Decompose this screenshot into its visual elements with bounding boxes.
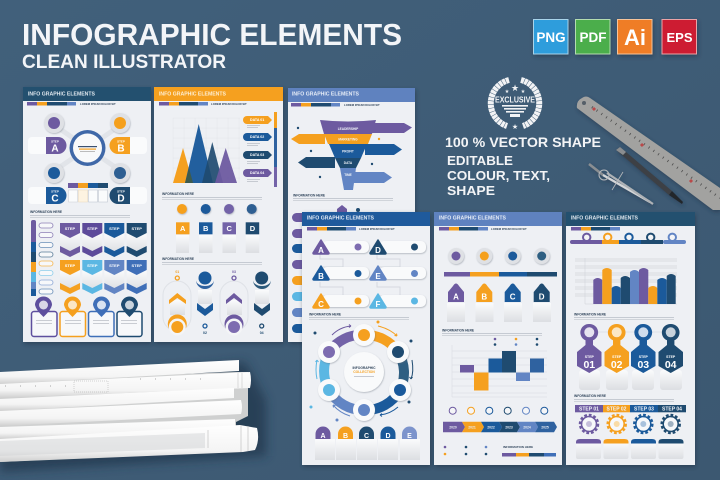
stars: ★ — [511, 83, 519, 93]
data tags — [243, 116, 272, 177]
cycle ring — [310, 320, 413, 422]
data tags: DATA 04 — [250, 171, 264, 175]
title: CLEAN ILLUSTRATOR — [22, 51, 226, 73]
cycle bullets — [310, 320, 412, 422]
colour strip: LOREM IPSUM DOLOR SIT — [80, 102, 116, 106]
panel 5: tags and bar chart — [434, 212, 562, 465]
info heading: INFORMATION HERE — [30, 210, 62, 214]
bell tags: C — [510, 292, 516, 302]
roll 3 — [0, 388, 234, 411]
bottom tabs: C — [364, 433, 369, 440]
teal triangle — [202, 142, 223, 183]
data tags: DATA 02 — [250, 135, 264, 139]
step C: STEP — [51, 190, 59, 194]
step A: STEP — [51, 140, 59, 144]
title — [22, 17, 402, 73]
step pills — [39, 223, 53, 294]
data tags: DATA 03 — [250, 153, 264, 157]
header — [154, 87, 283, 101]
roll 6 — [0, 425, 258, 462]
letter triangles: A — [318, 246, 324, 255]
bottom tabs: B — [343, 433, 348, 440]
badge: EPS — [662, 20, 696, 54]
step pin 01 — [577, 324, 602, 373]
colour strip — [291, 103, 380, 107]
node icons — [323, 329, 406, 416]
funnel labels — [338, 127, 359, 177]
step bar — [444, 272, 557, 276]
process column 03: 03 — [232, 270, 236, 274]
step pin 03 — [631, 324, 656, 373]
letter triangles: B — [318, 272, 324, 281]
timeline bar — [570, 240, 686, 244]
info heading — [162, 257, 262, 265]
header: INFO GRAPHIC ELEMENTS — [159, 92, 226, 98]
header: INFO GRAPHIC ELEMENTS — [439, 216, 506, 222]
side pills — [292, 213, 312, 333]
chart bands — [575, 258, 677, 304]
colour strip — [27, 102, 116, 106]
panel sheet — [288, 88, 415, 342]
overlap — [185, 168, 193, 183]
step pin 02: STEP — [612, 355, 622, 359]
arrow purple — [372, 123, 412, 133]
step pin 04: STEP — [666, 355, 676, 359]
format badges — [534, 20, 696, 54]
panel 1: hub and steps — [23, 87, 151, 342]
colour strip — [571, 227, 620, 230]
year arrows: 2021 — [468, 425, 476, 429]
badge: EPS: EPS — [666, 30, 693, 45]
funnel blue — [329, 144, 367, 158]
stars: ★ — [512, 123, 518, 131]
ring nodes — [318, 324, 411, 421]
step bar: STEP 02 — [607, 407, 627, 413]
year arrows: 2022 — [487, 425, 495, 429]
bottom tabs — [316, 426, 417, 440]
arrow light blue — [353, 172, 392, 183]
letter blocks: B — [203, 224, 209, 233]
centre hub: COLLECTION — [353, 370, 375, 374]
step banners row 2 — [60, 260, 147, 294]
bell tags: D — [539, 292, 545, 302]
step bar: STEP 01 — [579, 407, 599, 413]
colour strip: LOREM IPSUM DOLOR SIT — [344, 103, 380, 107]
bottom tabs: A — [320, 433, 326, 440]
step banners row 1: STEP — [131, 226, 142, 231]
step bar: STEP 03 — [634, 407, 654, 413]
step B: STEP — [117, 140, 125, 144]
colour strip: LOREM IPSUM DOLOR SIT — [491, 227, 527, 231]
step pin cards — [579, 370, 682, 390]
ruler — [577, 96, 720, 210]
stars: ★ — [505, 89, 510, 95]
colour strip — [307, 227, 395, 231]
vector text block: SHAPE — [447, 183, 495, 198]
arrow navy — [298, 157, 335, 168]
funnel labels: PROFIT — [342, 150, 354, 154]
bottom legend — [444, 446, 487, 455]
step banners row 2: STEP — [109, 263, 120, 268]
stars: ★ — [521, 89, 526, 95]
badge: Ai: Ai — [624, 25, 646, 50]
step banners row 1: STEP — [109, 226, 120, 231]
header: INFO GRAPHIC ELEMENTS — [307, 216, 374, 222]
step banners row 2: STEP — [87, 263, 98, 268]
gears — [580, 416, 679, 432]
data tags: DATA 01 — [250, 118, 264, 122]
pin cards — [32, 312, 142, 336]
info heading — [30, 210, 130, 218]
vector text block: EDITABLE — [447, 153, 513, 168]
funnel — [320, 120, 376, 190]
vector text block: COLOUR, TEXT, — [447, 168, 550, 183]
year arrows: 2024 — [523, 425, 531, 429]
triangle chart — [173, 118, 240, 183]
bottom tabs: D — [385, 433, 391, 440]
small tab icons — [337, 205, 360, 212]
backing sheet — [0, 372, 248, 462]
vertical step bar — [31, 220, 36, 296]
step B: B — [117, 144, 125, 154]
emblem stripes — [502, 105, 528, 117]
bell tags — [448, 284, 550, 302]
exclusive emblem — [491, 80, 539, 131]
ring segments — [324, 335, 404, 410]
letter blocks: C — [226, 224, 232, 233]
info heading — [309, 312, 409, 320]
header — [288, 88, 415, 102]
panel 6: steps and charts — [566, 212, 695, 465]
bottom strip — [502, 445, 556, 456]
year arrows: 2023 — [505, 425, 513, 429]
step bar — [575, 405, 686, 413]
info heading — [162, 192, 262, 200]
letter triangles: C — [318, 300, 324, 309]
header: INFO GRAPHIC ELEMENTS — [292, 92, 359, 98]
arrow blue — [365, 144, 402, 155]
centre circle — [70, 130, 106, 166]
columns — [593, 268, 676, 304]
step pin 03: STEP — [639, 355, 649, 359]
step D — [110, 187, 147, 204]
info heading: INFORMATION HERE — [162, 257, 194, 261]
step pin 01: 01 — [583, 359, 595, 371]
bottom cards — [315, 439, 420, 460]
arrow orange — [291, 134, 325, 144]
info heading — [574, 394, 674, 402]
centre hub: INFOGRAPHIC — [352, 366, 376, 370]
step pin 04 — [658, 324, 683, 373]
step D: D — [117, 194, 125, 204]
gear cards — [576, 439, 684, 459]
step circles — [448, 248, 550, 264]
letter blocks: A — [180, 224, 186, 233]
step C — [28, 187, 66, 204]
compass — [589, 164, 653, 204]
panel 4: cycle — [302, 212, 430, 465]
header: INFO GRAPHIC ELEMENTS — [28, 92, 95, 98]
pin heads — [35, 296, 138, 317]
step pin 04: 04 — [665, 359, 677, 371]
funnel arrows — [291, 123, 412, 183]
step A — [28, 137, 66, 154]
year arrows: 2025 — [541, 425, 549, 429]
legend — [494, 338, 538, 346]
bottom strip: INFORMATION HERE — [503, 445, 533, 449]
gear hubs — [582, 416, 678, 432]
exclusive label: EXCLUSIVE — [495, 96, 536, 104]
colour strip: LOREM IPSUM DOLOR SIT — [359, 227, 395, 231]
badge: PDF — [576, 20, 610, 54]
letter cards — [322, 241, 426, 307]
pen — [616, 147, 683, 204]
info heading — [574, 312, 674, 320]
badge: PNG: PNG — [536, 30, 566, 45]
timeline circles — [583, 234, 676, 241]
blue triangle — [185, 124, 213, 183]
letter triangles: D — [375, 246, 381, 255]
header — [566, 212, 695, 226]
roll 2 — [0, 372, 251, 398]
node icons — [44, 113, 130, 183]
badge: PNG — [534, 20, 568, 54]
year arrows: 2020 — [449, 425, 457, 429]
process column 02: 02 — [203, 331, 207, 335]
step pin 01: STEP — [585, 355, 595, 359]
mini table — [68, 183, 108, 202]
step pin 02: 02 — [611, 359, 623, 371]
funnel labels: LEADERSHIP — [338, 127, 359, 131]
step C: C — [51, 194, 59, 204]
header — [302, 212, 430, 226]
panel sheet — [302, 212, 430, 465]
roll 4 — [0, 400, 242, 426]
badge: PDF: PDF — [580, 30, 606, 45]
info heading: INFORMATION HERE — [309, 312, 341, 316]
pin card text lines — [36, 320, 137, 324]
info heading — [442, 328, 542, 336]
process column 03 — [224, 270, 244, 336]
bell tags: A — [453, 292, 459, 302]
info heading: INFORMATION HERE — [442, 328, 474, 332]
funnel orange — [324, 134, 372, 144]
column chart — [575, 258, 677, 304]
info heading: INFORMATION HERE — [574, 312, 606, 316]
step banners row 2: STEP — [65, 263, 76, 268]
funnel labels: MARKETING — [338, 138, 358, 142]
step banners row 1: STEP — [87, 226, 98, 231]
bell cards — [447, 303, 551, 322]
panel sheet — [154, 87, 283, 342]
vector text block: 100 % VECTOR SHAPE — [445, 134, 601, 150]
hub connectors — [60, 129, 115, 167]
panel 3: funnel — [288, 88, 415, 342]
funnel light blue — [340, 168, 356, 190]
rolls shadow — [0, 362, 266, 472]
letter icons — [354, 244, 418, 304]
info heading: INFORMATION HERE — [162, 192, 194, 196]
step bar: STEP 04 — [662, 407, 682, 413]
chart grid — [173, 118, 240, 183]
process column 01 — [168, 270, 187, 336]
header: INFO GRAPHIC ELEMENTS — [571, 216, 638, 222]
colour strip — [159, 102, 247, 106]
funnel bullets — [297, 127, 380, 178]
step pin 03: 03 — [637, 359, 649, 371]
letter blocks — [176, 222, 259, 253]
funnel navy — [335, 158, 361, 168]
step banners row 1 — [60, 223, 147, 257]
process column 02 — [196, 272, 214, 335]
orange triangle — [173, 148, 193, 183]
process column 04: 04 — [260, 331, 264, 335]
header — [23, 87, 151, 101]
bottom tabs: E — [407, 433, 412, 440]
vector text block — [445, 134, 601, 198]
info heading: INFORMATION HERE — [293, 194, 325, 198]
info heading — [293, 194, 393, 201]
connectors — [320, 254, 400, 296]
header — [434, 212, 562, 226]
colour strip — [439, 227, 527, 231]
title: INFOGRAPHIC ELEMENTS — [22, 17, 402, 52]
laurel wreath — [491, 80, 539, 126]
panel sheet — [434, 212, 562, 465]
roll 1 — [0, 360, 239, 384]
chart grid — [452, 345, 547, 397]
process tracks — [163, 281, 248, 331]
centre hub — [344, 352, 384, 392]
purple triangle — [215, 148, 237, 183]
letter triangles: E — [375, 272, 381, 281]
colour strip: LOREM IPSUM DOLOR SIT — [211, 102, 247, 106]
side bar — [274, 112, 277, 187]
bell tags: B — [481, 292, 487, 302]
stars — [505, 83, 526, 131]
badge: Ai — [618, 20, 652, 54]
roll 5 — [0, 419, 235, 439]
funnel labels: DATA — [344, 161, 353, 165]
funnel labels: TIME — [344, 173, 352, 177]
panel sheet — [566, 212, 695, 465]
step D: STEP — [117, 190, 125, 194]
step banners row 2: STEP — [131, 263, 142, 268]
letter triangles — [313, 240, 386, 309]
step pin connector — [597, 331, 664, 333]
letter blocks: D — [250, 224, 256, 233]
letter triangles: F — [376, 300, 381, 309]
step A: A — [51, 144, 59, 154]
process column 04 — [253, 272, 271, 335]
step banners row 1: STEP — [65, 226, 76, 231]
step B — [110, 137, 147, 154]
bars — [460, 351, 544, 390]
circle row — [177, 204, 257, 214]
year arrows — [443, 422, 557, 432]
info heading: INFORMATION HERE — [574, 394, 606, 398]
paper rolls — [0, 360, 266, 472]
panel 2: triangle chart — [154, 87, 283, 342]
bar chart — [452, 345, 547, 397]
step pin 02 — [604, 324, 629, 373]
process column 01: 01 — [175, 270, 179, 274]
panel sheet — [23, 87, 151, 342]
tag captions — [247, 125, 260, 182]
year circles — [449, 407, 548, 414]
funnel purple — [320, 120, 376, 134]
outer arrows — [316, 324, 413, 416]
